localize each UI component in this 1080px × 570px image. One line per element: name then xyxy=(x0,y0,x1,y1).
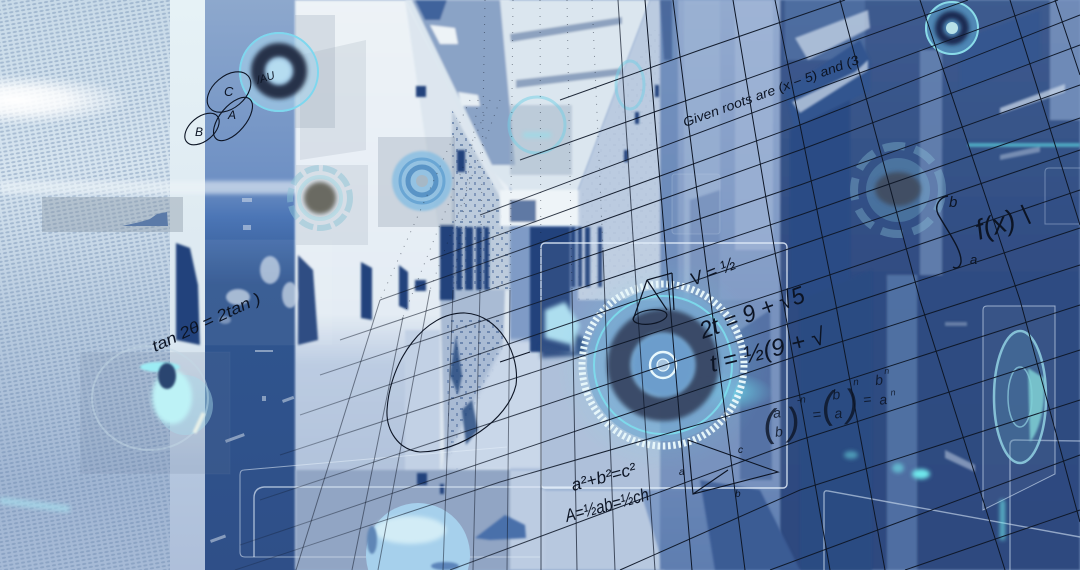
HUD frame: right xyxy=(983,306,1055,510)
venn diagram note: /AU xyxy=(254,70,276,87)
pale reflections on dark racks xyxy=(219,10,1065,472)
HUD frame: bottom left outer xyxy=(240,447,540,557)
eye: top right xyxy=(925,1,979,55)
eye: faint far corridor xyxy=(509,61,644,153)
eye: top left xyxy=(239,32,319,112)
note: power of fractions formula: a xyxy=(772,404,782,421)
note: power of fractions formula: b xyxy=(874,371,884,388)
note: power of fractions formula: = xyxy=(812,406,822,424)
note: pythagoras: a²+b²=c² xyxy=(569,459,639,495)
note: power of fractions formula: n xyxy=(853,377,860,388)
translucent panels xyxy=(42,15,455,474)
note: power of fractions formula: -n xyxy=(796,394,807,406)
note: given roots: Given roots are (x − 5) and (3 xyxy=(681,52,862,130)
venn diagram note xyxy=(179,64,276,151)
globe xyxy=(366,503,526,570)
dark server blocks xyxy=(176,0,1040,570)
teal streak xyxy=(968,143,1080,147)
note: area formula: A=½ab=½ch xyxy=(562,484,651,526)
large scanner circle xyxy=(558,260,773,470)
note: power of fractions formula: n xyxy=(890,387,896,398)
corridor speckle xyxy=(445,30,660,470)
note: large hand-drawn circle xyxy=(387,313,530,452)
note: power of fractions formula: ( xyxy=(761,403,781,446)
note: power of fractions formula: n xyxy=(884,366,890,376)
grid: falling lines centre xyxy=(541,0,655,570)
cyan cloud behind frame xyxy=(541,302,585,358)
HUD frame: bottom right xyxy=(824,491,1080,570)
note: power of fractions formula: b xyxy=(774,423,784,440)
HUD frame: vertical right xyxy=(1010,440,1080,570)
grid: fan lines lower xyxy=(296,290,510,570)
eye: mid right xyxy=(854,146,942,234)
note: power of fractions formula: b xyxy=(832,386,841,403)
note: right triangle: c xyxy=(738,445,743,456)
dark rack column xyxy=(205,0,296,570)
bright lens flare xyxy=(0,74,300,194)
venn diagram note: A xyxy=(227,108,236,122)
note: power of fractions formula: ) xyxy=(781,400,802,444)
grid: fan lines upper dotted xyxy=(380,0,603,317)
eye: brown centre xyxy=(290,168,350,228)
note: power of fractions formula: ) xyxy=(839,382,860,426)
eye: blue ring target xyxy=(392,151,452,211)
eye: lower left glow xyxy=(92,346,213,450)
cyan streak on door xyxy=(0,497,70,513)
grid: falling lines right xyxy=(645,0,1080,570)
note: power of fractions formula: a xyxy=(834,405,843,422)
note: right triangle xyxy=(679,440,778,500)
perspective grid xyxy=(235,0,1080,570)
HUD frame: centre xyxy=(541,243,787,488)
note: power of fractions formula: ( xyxy=(819,384,840,428)
left corridor wall xyxy=(295,0,510,570)
panel: perforated door at left xyxy=(0,0,170,570)
HUD frame: upper right xyxy=(1045,168,1080,224)
floor xyxy=(440,340,545,470)
venn diagram note: C xyxy=(224,84,234,99)
note: integral xyxy=(937,194,1034,268)
note: integral: f(x) \ xyxy=(971,199,1034,246)
lower translucent console xyxy=(296,470,665,570)
note: power of fractions formula xyxy=(758,365,900,446)
note: integral: a xyxy=(970,252,977,267)
right corridor wall xyxy=(541,0,1080,570)
note: tangent formula: tan 2θ = 2tan ) xyxy=(150,290,264,356)
note: power of fractions formula: a xyxy=(878,391,888,408)
note: right triangle: a xyxy=(679,467,685,478)
corridor ceiling and far end xyxy=(405,0,650,226)
grid: rising lines xyxy=(235,0,1080,570)
note: equation t: t = ½(9 + √ xyxy=(707,323,829,378)
HUD frame: bottom left inner xyxy=(254,487,577,557)
HUD frame: mid right xyxy=(672,174,720,234)
venn diagram note: B xyxy=(195,125,203,139)
note: equation 2t: 2t = 9 + √5 xyxy=(695,281,809,345)
light door frame xyxy=(170,0,205,570)
rack highlights xyxy=(210,198,294,543)
note: power of fractions formula: = xyxy=(862,391,872,407)
note: cone xyxy=(632,273,674,326)
cyan sparks xyxy=(844,451,1005,540)
panel: small area chart xyxy=(42,197,183,232)
note: right triangle: b xyxy=(735,489,741,500)
note: integral: b xyxy=(949,194,957,211)
eye: right oval xyxy=(994,331,1046,463)
note: volume formula: V = ½ xyxy=(687,253,739,290)
